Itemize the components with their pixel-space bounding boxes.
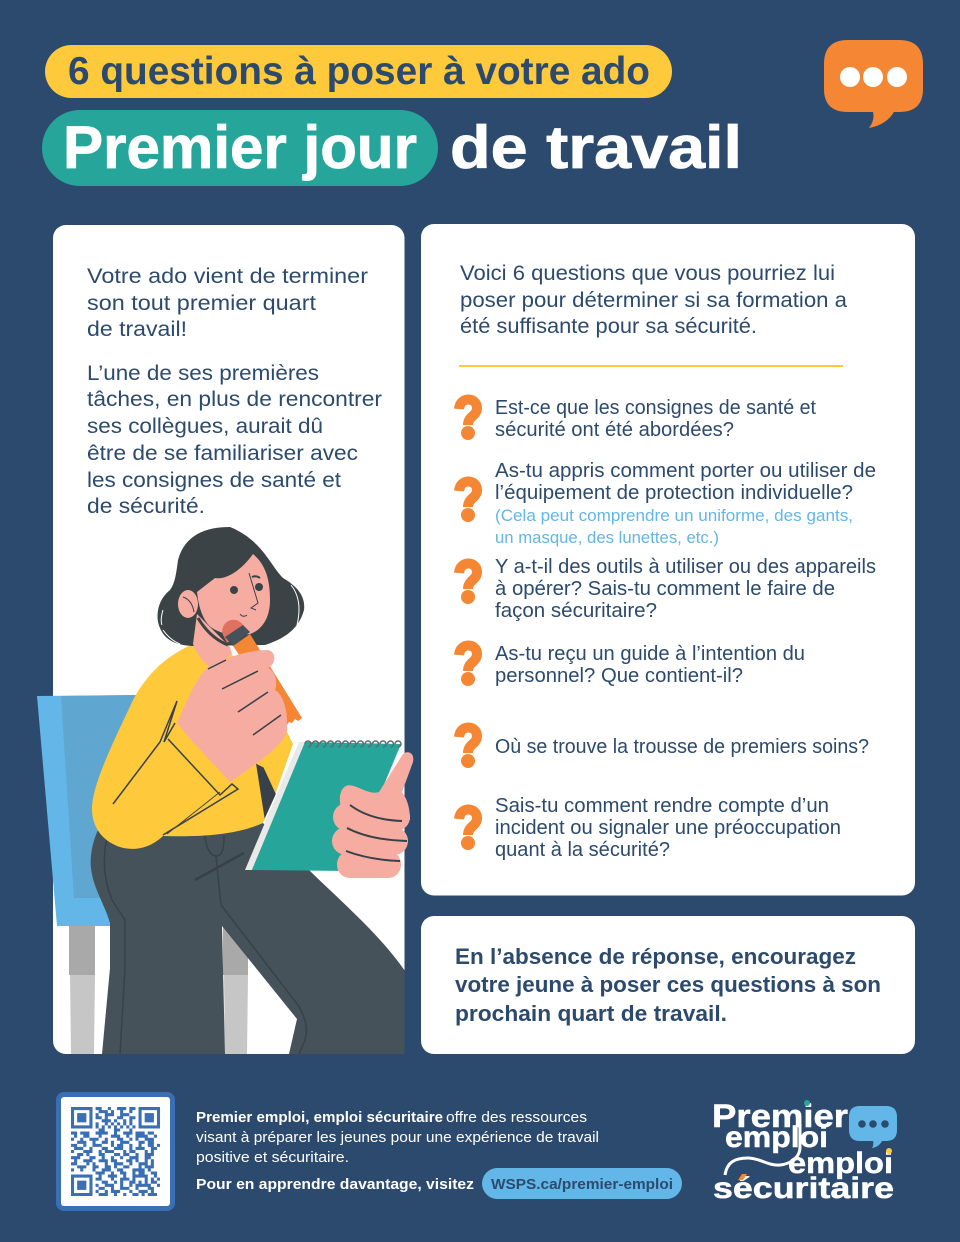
text block: introduction: de sécurité. bbox=[87, 495, 205, 518]
panel: closing advice: En l’absence de réponse, encouragez bbox=[455, 944, 856, 969]
question 2: un masque, des lunettes, etc.) bbox=[495, 529, 719, 547]
logo: Premier emploi, emploi sécuritaire bbox=[712, 1098, 897, 1205]
link pill bbox=[482, 1168, 682, 1199]
text block: intro to the questions bbox=[460, 262, 847, 338]
text block: introduction: Votre ado vient de terminer bbox=[87, 265, 368, 288]
text block: introduction: de travail! bbox=[87, 318, 187, 341]
text block: introduction: les consignes de santé et bbox=[87, 469, 341, 492]
ear bbox=[178, 590, 198, 618]
text block: footer resources: Pour en apprendre davantage, visitez bbox=[196, 1176, 474, 1193]
panel: six questions bbox=[421, 224, 915, 896]
text block: introduction: L’une de ses premières bbox=[87, 362, 319, 385]
trouser seams bbox=[104, 836, 306, 1054]
text block: footer resources: positive et sécuritaire. bbox=[196, 1149, 349, 1166]
text block: footer resources bbox=[196, 1109, 599, 1193]
panel: closing advice: votre jeune à poser ces questions à son bbox=[455, 972, 881, 997]
question 3: Y a-t-il des outils à utiliser ou des appareils bbox=[495, 556, 876, 578]
question 6: Sais-tu comment rendre compte d’un bbox=[495, 795, 829, 817]
question 6: quant à la sécurité? bbox=[495, 839, 670, 861]
question 3 bbox=[459, 556, 876, 622]
question 2: As-tu appris comment porter ou utiliser de bbox=[495, 460, 876, 482]
question 6: incident ou signaler une préoccupation bbox=[495, 817, 841, 839]
text block: intro to the questions: poser pour déterminer si sa formation a bbox=[460, 289, 847, 312]
chair back bbox=[37, 695, 228, 926]
text block: introduction: tâches, en plus de rencontrer bbox=[87, 388, 382, 411]
text block: footer resources: Premier emploi, emploi sécuritaire bbox=[196, 1109, 443, 1126]
logo: Premier emploi, emploi sécuritaire: sécuritaire bbox=[713, 1172, 894, 1205]
question 5 bbox=[459, 728, 869, 768]
icon: orange speech bubble bbox=[824, 40, 923, 128]
chair legs bbox=[69, 926, 248, 1054]
trousers bbox=[91, 820, 405, 1054]
question 6 bbox=[459, 795, 841, 861]
heading: main title: Premier jour bbox=[63, 114, 417, 181]
neck bbox=[193, 614, 232, 668]
panel: closing advice bbox=[421, 916, 915, 1054]
shirt folds bbox=[113, 701, 275, 835]
QR code bbox=[56, 1092, 175, 1211]
heading: main title: de travail bbox=[450, 114, 742, 181]
text block: footer resources: visant à préparer les jeunes pour une expérience de travail bbox=[196, 1129, 599, 1146]
question 3: à opérer? Sais-tu comment le faire de bbox=[495, 578, 835, 600]
hand holding notebook bbox=[332, 752, 413, 878]
text block: introduction: être de se familiariser avec bbox=[87, 442, 358, 465]
text block: introduction: ses collègues, aurait dû bbox=[87, 415, 323, 438]
question 2 bbox=[459, 460, 876, 547]
shirt bbox=[92, 644, 293, 849]
pencil bbox=[222, 620, 302, 725]
question 2: (Cela peut comprendre un uniforme, des gants, bbox=[495, 507, 853, 525]
jaw shadow bbox=[198, 618, 228, 645]
question 5: Où se trouve la trousse de premiers soins? bbox=[495, 736, 869, 758]
heading: main title bbox=[42, 110, 742, 186]
link pill: WSPS.ca/premier-emploi bbox=[491, 1176, 673, 1193]
facial features bbox=[230, 573, 262, 616]
hand holding pencil bbox=[177, 650, 287, 782]
face bbox=[197, 554, 270, 635]
logo: Premier emploi, emploi sécuritaire: emploi bbox=[788, 1147, 893, 1180]
heading: subtitle pill: 6 questions à poser à votre ado bbox=[68, 50, 650, 93]
text block: introduction bbox=[87, 265, 382, 518]
question 1: sécurité ont été abordées? bbox=[495, 419, 734, 441]
text block: footer resources: offre des ressources bbox=[446, 1109, 587, 1126]
question 4: personnel? Que contient-il? bbox=[495, 665, 743, 687]
logo: Premier emploi, emploi sécuritaire: Premier bbox=[712, 1098, 848, 1134]
question 4: As-tu reçu un guide à l’intention du bbox=[495, 643, 805, 665]
question 3: façon sécuritaire? bbox=[495, 600, 657, 622]
text block: intro to the questions: Voici 6 questions que vous pourriez lui bbox=[460, 262, 835, 285]
illustration: woman taking notes on a chair bbox=[37, 527, 413, 1054]
notebook bbox=[245, 741, 401, 871]
text block: introduction: son tout premier quart bbox=[87, 292, 316, 315]
hair bbox=[158, 527, 304, 646]
question 1: Est-ce que les consignes de santé et bbox=[495, 397, 816, 419]
hair highlight bbox=[161, 585, 299, 644]
panel: introduction and illustration bbox=[37, 225, 413, 1054]
logo: Premier emploi, emploi sécuritaire: emploi bbox=[725, 1121, 828, 1154]
panel: closing advice: prochain quart de travail. bbox=[455, 1001, 727, 1026]
text block: intro to the questions: été suffisante pour sa sécurité. bbox=[460, 315, 757, 338]
question 2: l’équipement de protection individuelle? bbox=[495, 482, 853, 504]
question 4 bbox=[459, 643, 805, 687]
question 1 bbox=[459, 397, 816, 441]
